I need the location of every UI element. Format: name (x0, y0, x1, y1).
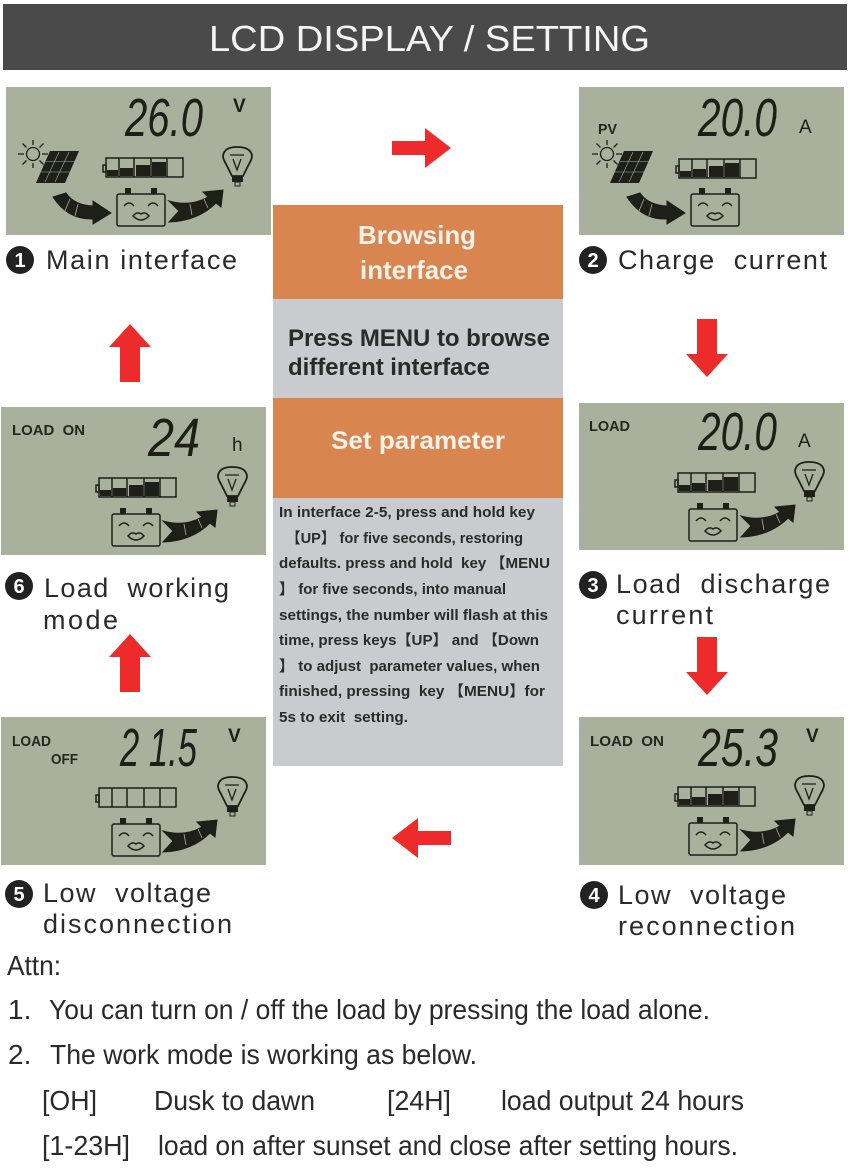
label: LOAD OFF: LOAD (12, 733, 51, 750)
panel: press menu note: Press MENU to browse (288, 325, 550, 352)
label: load working mode: Load working (44, 573, 229, 603)
icon: battery level (676, 159, 756, 178)
icon: arrow and battery face (627, 188, 739, 226)
label: load working mode: mode (43, 605, 118, 635)
panel: charge current LCD (579, 87, 844, 235)
icon: sun and solar panel (592, 140, 653, 183)
title (3, 4, 847, 70)
icons: battery, face, arrow, bulb (96, 467, 247, 546)
icon: solar panel (36, 151, 79, 183)
label: load discharge current (579, 569, 830, 630)
arrow: down 1 (686, 319, 728, 377)
notes: attention: load on after sunset and close after setting hours. (158, 1130, 738, 1161)
label: PV: PV (598, 121, 617, 138)
label: LOAD ON: LOAD ON (590, 733, 664, 750)
arrow: up 2 (109, 634, 151, 692)
panel: low voltage reconnection LCD (579, 717, 844, 865)
label: load discharge current: 3 (587, 575, 599, 597)
label: low voltage disconnection: disconnection (43, 909, 232, 939)
label: load discharge current: current (616, 600, 713, 630)
panel: browsing interface heading (273, 205, 563, 299)
panel: set parameter instructions: finished, pressing key 【MENU】for (279, 683, 545, 700)
panel: set parameter instructions: 5s to exit setting. (279, 709, 408, 726)
label: low voltage reconnection (580, 880, 795, 941)
arrow: up 1 (109, 324, 151, 382)
label: charge current: Charge current (618, 245, 827, 275)
notes: attention: [24H] (387, 1085, 451, 1116)
label: load working mode (5, 572, 229, 635)
notes: attention: load output 24 hours (501, 1085, 744, 1116)
icon: arrow into battery (53, 193, 111, 224)
label: low voltage reconnection: 4 (588, 885, 600, 907)
notes: attention (7, 950, 744, 1161)
arrow: left (392, 818, 451, 858)
icon: arrow out of battery (169, 190, 223, 222)
label: LOAD OFF: OFF (51, 751, 78, 768)
reading: 20.0 A: A (798, 431, 811, 452)
notes: attention: 2. (8, 1039, 31, 1070)
label: load working mode: 6 (13, 576, 25, 598)
label: low voltage reconnection: Low voltage (618, 880, 786, 910)
notes: attention: 1. (8, 994, 31, 1025)
label: charge current: 2 (587, 250, 599, 272)
icons: empty battery, face, arrow, bulb (96, 777, 247, 856)
panel: press menu note: different interface (288, 354, 490, 381)
reading: 26.0 V: 26.0 (124, 88, 203, 148)
arrow: down 2 (686, 637, 728, 695)
panel: set parameter instructions: defaults. press and hold key 【MENU (279, 555, 550, 572)
notes: attention: [1-23H] (42, 1130, 130, 1161)
panel: set parameter instructions: time, press keys【UP】 and 【Down (279, 632, 539, 649)
panel: load working mode LCD (1, 407, 266, 555)
panel: set parameter instructions: settings, the number will flash at this (279, 607, 548, 624)
label: low voltage reconnection: reconnection (618, 911, 795, 941)
label: LOAD: LOAD (589, 418, 630, 435)
panel: set parameter heading: Set parameter (331, 427, 505, 455)
panel: browsing interface heading: interface (360, 255, 468, 285)
notes: attention: Dusk to dawn (154, 1085, 315, 1116)
panel: set parameter heading (273, 398, 563, 498)
reading: 20.0 A: A (799, 117, 812, 138)
panel: set parameter instructions: 】 for five seconds, into manual (279, 581, 506, 598)
icons: battery, face, arrow, bulb (675, 776, 824, 855)
label: LOAD ON: LOAD ON (12, 422, 85, 439)
notes: attention: You can turn on / off the load by pressing the load alone. (49, 994, 710, 1025)
label: load discharge current: Load discharge (616, 569, 830, 599)
icon: battery face (117, 188, 165, 226)
notes: attention: Attn: (7, 950, 61, 981)
icon: battery level (103, 158, 183, 177)
reading: 24 h: h (232, 435, 243, 456)
icon: sun (18, 140, 48, 168)
panel: main interface LCD (6, 87, 271, 235)
notes: attention: [OH] (42, 1085, 97, 1116)
panel: set parameter instructions: 】 to adjust parameter values, when (279, 658, 540, 675)
notes: attention: The work mode is working as below. (50, 1039, 477, 1070)
reading: 25.3 V: 25.3 (697, 718, 778, 778)
label: low voltage disconnection (5, 878, 232, 939)
reading: 20.0 A: 20.0 (697, 402, 777, 462)
label: main interface: Main interface (46, 245, 237, 275)
arrow: right (392, 128, 451, 168)
panel: set parameter instructions: 【UP】 for five seconds, restoring (286, 530, 523, 547)
label: LOAD OFF (12, 733, 78, 768)
reading: 25.3 V: V (806, 726, 819, 747)
reading: 24 h (147, 408, 243, 468)
label: low voltage disconnection: 5 (13, 884, 25, 906)
panel: browsing interface heading: Browsing (358, 220, 476, 250)
label: low voltage disconnection: Low voltage (43, 878, 211, 908)
label: main interface: 1 (14, 250, 26, 272)
panel: set parameter instructions: In interface 2-5, press and hold key (279, 504, 536, 521)
panel: set parameter instructions (273, 498, 563, 766)
title: LCD DISPLAY / SETTING (209, 18, 650, 59)
panel: load discharge LCD (579, 402, 844, 550)
reading: 21.5 V: 2 1.5 (119, 718, 198, 778)
reading: 24 h: 24 (147, 408, 200, 468)
panel: low voltage disconnection LCD (1, 717, 266, 865)
icons: battery, face, arrow, bulb (675, 462, 824, 541)
reading: 26.0 V: V (233, 96, 246, 117)
icon: light bulb (223, 147, 252, 186)
panel: press menu note (273, 299, 563, 398)
reading: 21.5 V: V (228, 726, 241, 747)
reading: 20.0 A: 20.0 (697, 88, 777, 148)
